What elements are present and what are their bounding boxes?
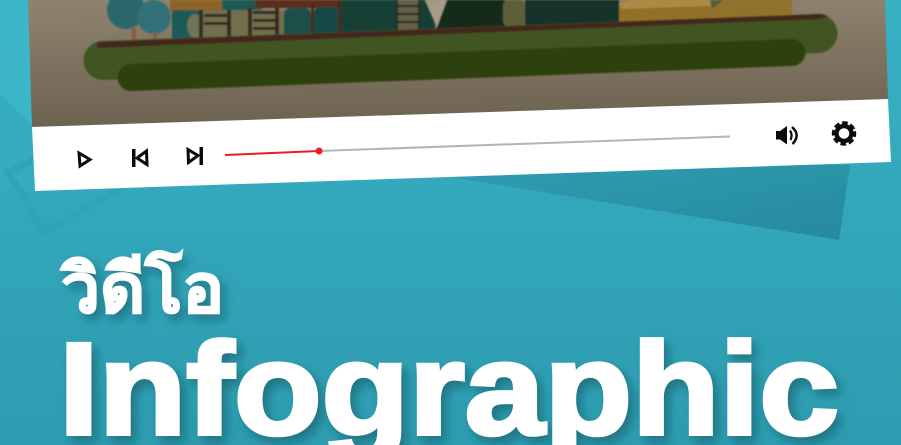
progress bar (225, 136, 730, 155)
island dark band (118, 39, 806, 91)
video panel (28, 0, 888, 127)
island grass (84, 14, 838, 80)
icon: volume (776, 126, 797, 144)
icon: previous (132, 149, 147, 167)
heading: Thai: วิดีโอ (60, 250, 224, 327)
control bar (32, 99, 891, 191)
icon: next (188, 147, 203, 165)
island soil strip (97, 14, 828, 48)
icon: settings gear (832, 121, 856, 146)
houses and trees (107, 0, 792, 42)
icon: play (79, 153, 90, 166)
illustration: village on floating island (84, 0, 838, 91)
